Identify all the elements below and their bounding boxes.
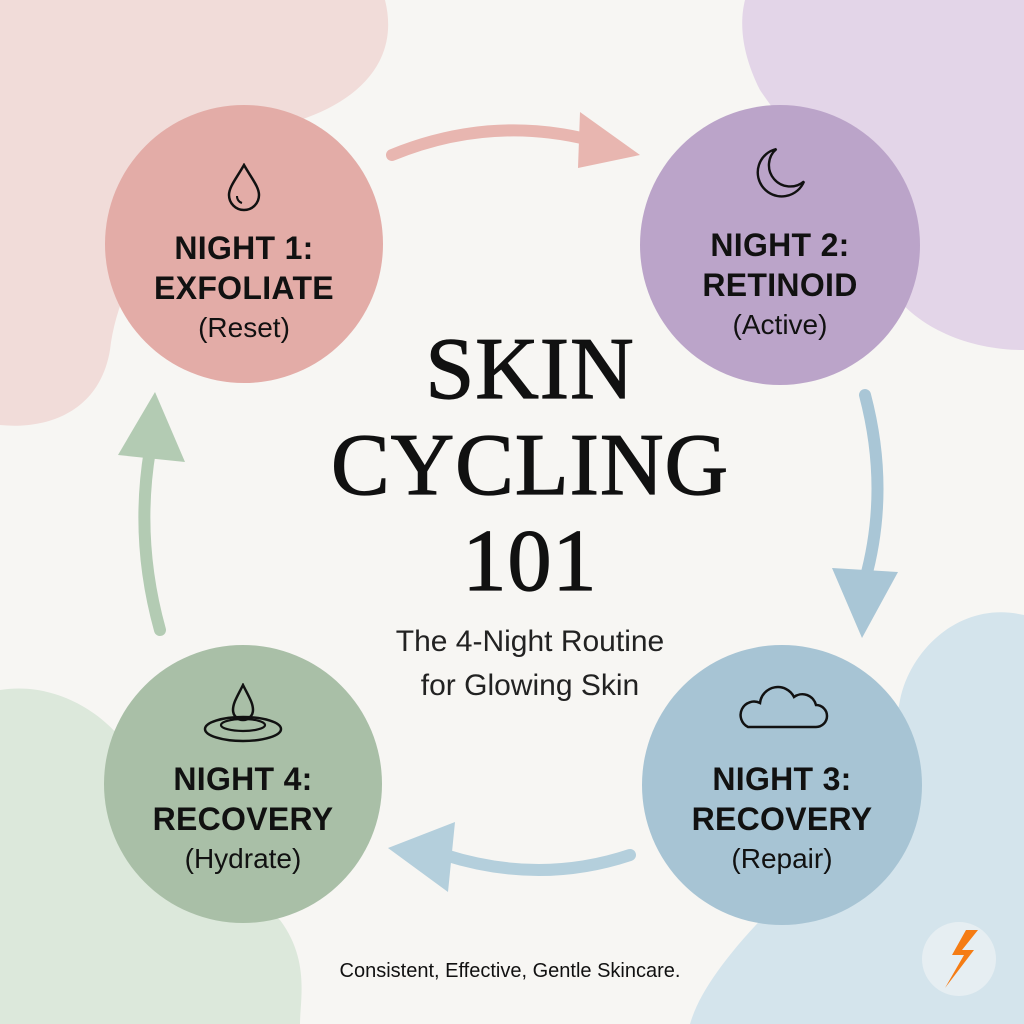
text: night 4: RECOVERY (153, 801, 333, 837)
text: night 1: (Reset) (198, 312, 290, 343)
text: night 3 (692, 761, 872, 874)
text: night 1: EXFOLIATE (154, 270, 334, 306)
title: 101 (462, 513, 598, 610)
icon: moon (756, 148, 806, 198)
title: CYCLING (331, 417, 729, 514)
text: night 2: RETINOID (702, 267, 858, 303)
subtitle: for Glowing Skin (421, 669, 639, 702)
icon: lightning badge (922, 922, 996, 996)
text: night 2: NIGHT 2: (710, 227, 850, 263)
subtitle (396, 625, 664, 702)
title: SKIN (425, 321, 635, 418)
icon: cloud (739, 686, 828, 728)
text: night 2: (Active) (733, 309, 827, 340)
text: night 4 (153, 761, 333, 874)
text: night 1: NIGHT 1: (174, 230, 314, 266)
panel: night 4 (104, 645, 382, 923)
icon: drop ripple (204, 683, 282, 742)
subtitle: The 4-Night Routine (396, 625, 664, 658)
footer text: Consistent, Effective, Gentle Skincare. (340, 960, 680, 982)
panel: night 3 (642, 645, 922, 925)
text: night 2 (702, 227, 858, 340)
panel: night 1 (105, 105, 383, 383)
panel: night 2 (640, 105, 920, 385)
title (331, 321, 729, 610)
text: night 3: RECOVERY (692, 801, 872, 837)
text: night 1 (154, 230, 334, 343)
text: night 3: (Repair) (731, 843, 833, 874)
text: night 4: NIGHT 4: (173, 761, 313, 797)
text: night 4: (Hydrate) (185, 843, 301, 874)
text: night 3: NIGHT 3: (712, 761, 852, 797)
icon: water drop (228, 163, 260, 212)
